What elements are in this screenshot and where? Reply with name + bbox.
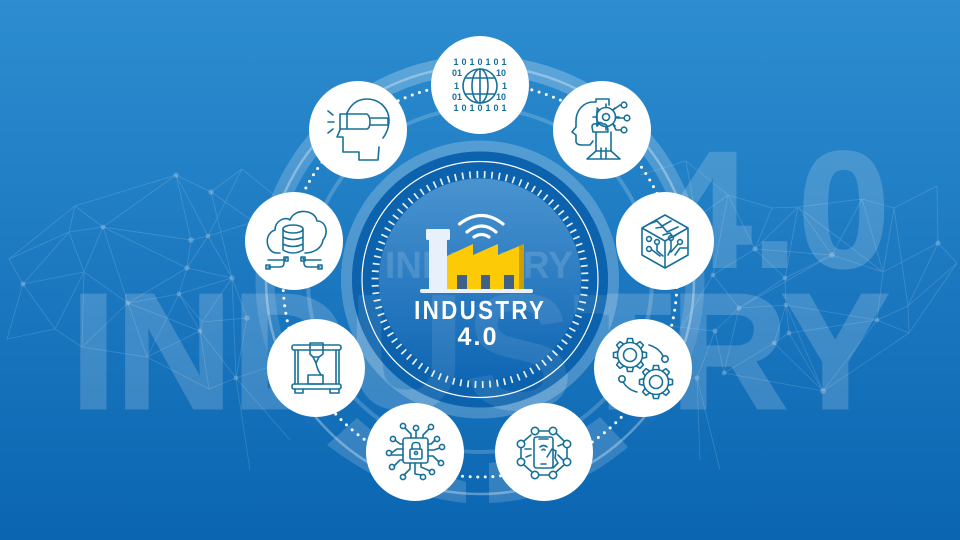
node: AI head [553, 81, 651, 179]
node: data globe: 10 [496, 68, 506, 78]
network nodes: left [21, 172, 250, 380]
node: 3D printer [267, 319, 365, 417]
dial ring [352, 152, 608, 408]
node: data globe: 1 [454, 81, 459, 91]
dotted orbit [283, 83, 677, 477]
icon: circuit cube [642, 215, 688, 268]
icon: AI head and gear [572, 99, 630, 159]
icon: VR head [328, 99, 389, 160]
ghost text inside dial: INDUSTRY [385, 245, 573, 287]
ghost shapes at ring bottom [327, 417, 628, 503]
icon: two gears [614, 338, 672, 398]
node: VR headset [309, 81, 407, 179]
node: data globe [431, 36, 529, 134]
node: gears [594, 319, 692, 417]
dial disc [379, 178, 581, 380]
dial halo [346, 146, 614, 413]
ghost letters over dial: INDUSTRY [71, 260, 889, 443]
icon: phone with nodes [517, 427, 571, 479]
node: data globe: 01 [452, 92, 462, 102]
node: data globe: 01 [452, 68, 462, 78]
dial thin circle [362, 162, 598, 398]
network: left [7, 169, 290, 470]
icon: 3D printer [292, 343, 341, 393]
central dial [341, 140, 619, 418]
title: 4.0: 4.0 [458, 323, 496, 351]
node: smart cube [616, 192, 714, 290]
wifi [460, 216, 503, 237]
factory base [420, 289, 533, 293]
dial ticks [375, 174, 585, 384]
node: cloud database [245, 192, 343, 290]
outer bright ring line [266, 66, 694, 494]
node: data globe: 1010101 [454, 103, 506, 113]
ghost text: 4.0: 4.0 [659, 118, 890, 303]
ghost text: INDUSTRY: INDUSTRY [71, 260, 889, 443]
outer translucent ring [265, 65, 695, 495]
title: INDUSTRY: INDUSTRY [414, 296, 544, 325]
node: cyber security chip [366, 403, 464, 501]
node: data globe: 1 [502, 81, 507, 91]
icon: padlock chip [386, 423, 445, 480]
icon: cloud database [266, 211, 326, 269]
inner translucent ring [308, 108, 652, 452]
network nodes: right [694, 240, 941, 394]
node: data globe: 1010101 [454, 57, 506, 67]
network: right [640, 161, 957, 470]
factory doors [457, 275, 514, 289]
factory building [447, 244, 524, 289]
node: data globe: 10 [496, 92, 506, 102]
node: smartphone network [495, 403, 593, 501]
icon: globe with binary [463, 69, 497, 103]
chimney [429, 240, 447, 289]
icon: factory [420, 216, 533, 293]
